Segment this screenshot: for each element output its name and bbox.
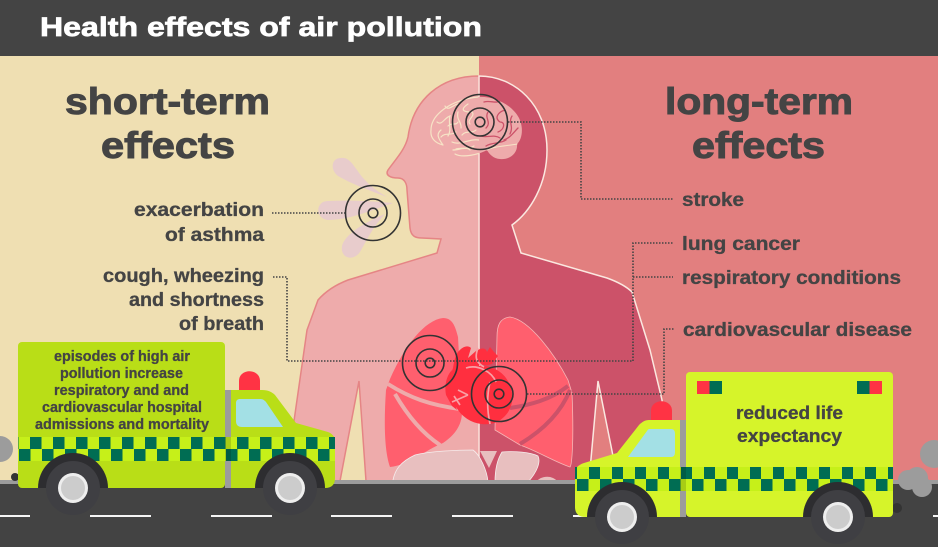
rear wheel	[38, 453, 108, 515]
ambulance: short-term	[18, 342, 335, 515]
label: respiratory conditions: respiratory conditions	[682, 268, 901, 289]
heading: long-term effects: long-term	[665, 81, 853, 122]
rear box	[686, 372, 893, 517]
rear wheel	[803, 482, 873, 544]
human body silhouette	[285, 76, 672, 484]
text on ambulance: respiratory and and	[54, 382, 189, 399]
abdominal organs	[393, 450, 558, 482]
target marker: airways	[346, 186, 400, 240]
gap between left arm and torso	[340, 381, 366, 481]
beacon	[239, 371, 260, 390]
door pillar	[225, 390, 231, 488]
panel: long-term background	[479, 56, 938, 486]
target marker: heart	[472, 366, 526, 422]
text on ambulance: reduced life	[736, 403, 843, 423]
window	[628, 429, 675, 457]
label: stroke: stroke	[682, 190, 744, 211]
body: left half	[285, 76, 479, 484]
heading: long-term effects	[665, 81, 853, 166]
panel: short-term background	[0, 56, 479, 486]
rear flag left	[697, 381, 722, 394]
label: exacerbation of asthma	[134, 200, 264, 246]
beacon	[651, 401, 672, 420]
icon: breath puffs from mouth	[318, 158, 393, 258]
check band	[575, 467, 893, 491]
rear flag right	[857, 381, 882, 394]
label: exacerbation of asthma: of asthma	[165, 225, 264, 246]
label: lung cancer: lung cancer	[682, 234, 801, 255]
road markings	[0, 515, 938, 517]
text on ambulance: expectancy	[737, 426, 842, 446]
dotted leader lines	[272, 122, 675, 394]
text on ambulance: admissions and mortality	[35, 416, 210, 433]
label: cough, wheezing and shortness of breath: cough, wheezing	[103, 266, 264, 287]
road	[0, 480, 938, 547]
rear box	[18, 342, 225, 488]
front wheel	[587, 482, 657, 544]
text on ambulance	[35, 348, 210, 433]
target marker: lung	[402, 336, 458, 390]
gap between right arm and torso	[589, 381, 618, 481]
label: exacerbation of asthma: exacerbation	[134, 200, 264, 221]
label: cough, wheezing and shortness of breath: of breath	[179, 314, 264, 335]
cab	[231, 390, 335, 488]
right exhaust smoke	[892, 440, 938, 513]
label: cardiovascular disease: cardiovascular disease	[683, 320, 912, 341]
title: Health effects of air pollution	[40, 12, 482, 42]
front wheel	[255, 453, 325, 515]
text on ambulance: cardiovascular hospital	[42, 399, 202, 416]
heading: short-term effects	[65, 81, 270, 166]
body: right half	[479, 76, 672, 484]
label: cough, wheezing and shortness of breath	[103, 266, 264, 335]
heading: short-term effects: short-term	[65, 81, 270, 122]
check band	[18, 437, 335, 461]
text on ambulance: pollution increase	[60, 365, 183, 382]
icon: brain	[431, 97, 522, 159]
ambulance: long-term	[575, 372, 893, 544]
header bar	[0, 0, 938, 56]
window	[236, 399, 283, 427]
text on ambulance: episodes of high air	[54, 348, 190, 365]
cab	[575, 420, 680, 517]
icon: heart	[445, 346, 512, 424]
door pillar	[680, 420, 686, 517]
label: cough, wheezing and shortness of breath: and shortness	[129, 290, 264, 311]
right lung	[495, 317, 573, 467]
text on ambulance	[736, 403, 843, 446]
left exhaust smoke	[0, 436, 19, 481]
target marker: brain	[452, 94, 508, 150]
heading: long-term effects: effects	[692, 125, 825, 166]
left lung	[385, 318, 462, 467]
heading: short-term effects: effects	[101, 125, 235, 166]
